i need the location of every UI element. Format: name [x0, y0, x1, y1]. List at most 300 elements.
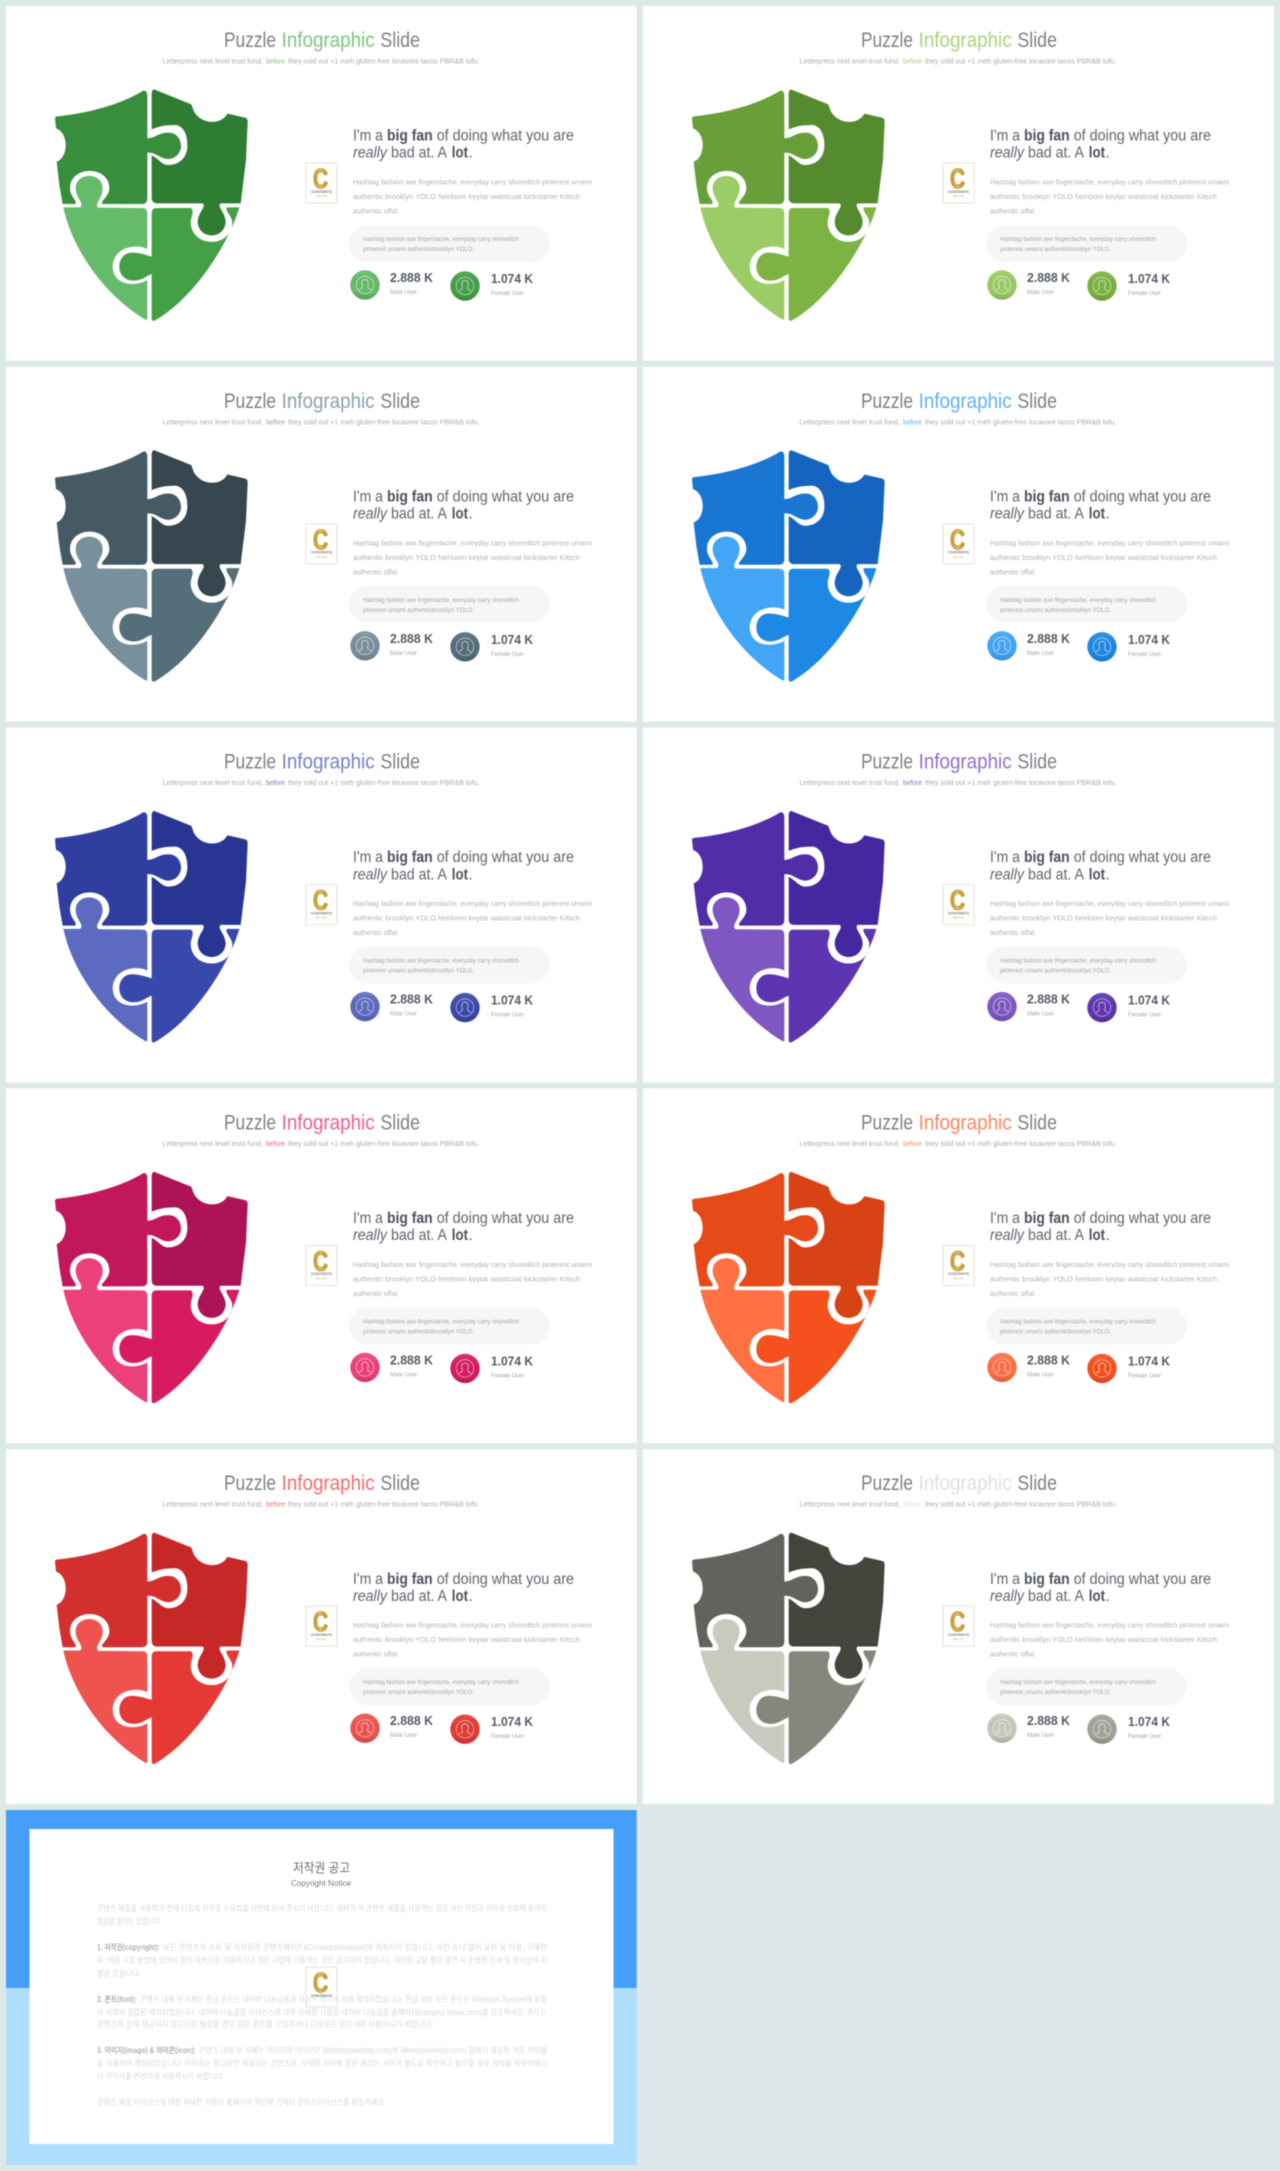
stat: female user: 1.074 K	[1128, 632, 1171, 647]
callout pill	[986, 947, 1187, 984]
stat: male user: 2.888 K	[390, 1713, 434, 1728]
stat: male user	[987, 1352, 1071, 1382]
logo	[306, 524, 337, 564]
logo watermark	[306, 1967, 337, 2007]
title: Puzzle	[861, 1111, 913, 1134]
subtitle	[800, 1139, 1117, 1148]
logo: CONTENTS	[311, 190, 332, 194]
callout pill: Hashtag fashion axe fingerstache, everyday carry shoreditch	[1000, 597, 1156, 604]
slide 8: deep orange	[643, 1088, 1274, 1443]
subtitle	[162, 417, 480, 426]
callout pill: pinterest umami authenticbrooklyn YOLO.	[1000, 1328, 1111, 1335]
heading	[353, 849, 574, 883]
callout pill	[349, 225, 550, 262]
title: Slide	[380, 29, 420, 52]
stat: male user: Male User	[390, 1372, 417, 1378]
heading: lot	[452, 1588, 468, 1605]
subtitle	[800, 56, 1117, 66]
heading: I'm a	[990, 849, 1020, 866]
panel background	[643, 6, 1274, 361]
logo	[306, 163, 337, 203]
slide 7: pink	[6, 1088, 637, 1443]
stat: male user: 2.888 K	[390, 631, 434, 646]
subtitle: Letterpress next level trust fund,	[162, 1139, 263, 1148]
slide 10: grey	[643, 1449, 1274, 1804]
stat: male user: 2.888 K	[1027, 992, 1071, 1007]
stat: male user: Male User	[1027, 1012, 1054, 1018]
stat: male user: 2.888 K	[390, 992, 434, 1007]
subtitle: Letterpress next level trust fund,	[162, 417, 263, 426]
logo: MAIN LOOK	[953, 555, 964, 559]
subtitle	[162, 1139, 480, 1148]
title: Infographic	[919, 1472, 1012, 1495]
heading: .	[468, 866, 473, 883]
copyright intro: 셨음을 알리는 것입니다.	[97, 1916, 161, 1926]
heading: really	[990, 1588, 1025, 1605]
title	[861, 1111, 1057, 1134]
body text: Hashtag fashion axe fingerstache, everyday carry shoreditch pinterest umami	[353, 178, 592, 186]
heading: bad at. A	[1028, 145, 1085, 162]
callout pill	[349, 947, 550, 984]
title	[861, 29, 1057, 52]
subtitle: they sold out +1 meh gluten-free locavore tacos PBR&B tofu.	[288, 56, 480, 66]
title: Slide	[380, 1472, 420, 1495]
subtitle: Letterpress next level trust fund,	[800, 417, 900, 426]
subtitle: before	[903, 56, 922, 66]
subtitle: before	[903, 778, 922, 787]
callout pill	[349, 1307, 550, 1344]
heading	[353, 1571, 574, 1605]
subtitle: Letterpress next level trust fund,	[162, 56, 263, 66]
stat: male user: Male User	[1027, 290, 1054, 296]
stat: male user	[987, 1713, 1071, 1743]
title	[224, 390, 420, 413]
stat: male user	[987, 992, 1071, 1021]
stat: female user: 1.074 K	[1128, 1353, 1171, 1368]
panel background	[643, 1449, 1274, 1804]
stat: male user: Male User	[390, 651, 417, 657]
callout pill: pinterest umami authenticbrooklyn YOLO.	[1000, 1689, 1111, 1696]
copyright clause 1	[97, 1942, 548, 1978]
stat: female user: 1.074 K	[491, 271, 534, 286]
heading: .	[468, 505, 473, 522]
heading: I'm a	[990, 1571, 1020, 1588]
logo: CONTENTS	[948, 551, 969, 555]
title: Infographic	[919, 1111, 1012, 1134]
heading: .	[468, 1227, 473, 1244]
body text: authentic offal.	[353, 1289, 399, 1298]
title	[861, 751, 1057, 774]
heading: .	[1106, 1227, 1110, 1244]
puzzle shield	[55, 811, 248, 1042]
body text	[990, 178, 1229, 216]
stat: female user	[1087, 1714, 1171, 1744]
callout pill: Hashtag fashion axe fingerstache, everyday carry shoreditch	[363, 597, 519, 604]
heading	[990, 488, 1211, 522]
heading: big fan	[1024, 1210, 1070, 1227]
heading: I'm a	[353, 1571, 383, 1588]
callout pill: pinterest umami authenticbrooklyn YOLO.	[363, 1328, 474, 1335]
heading: .	[1106, 505, 1110, 522]
logo: CONTENTS	[311, 1272, 332, 1276]
logo: MAIN LOOK	[316, 1637, 327, 1641]
heading: lot	[1089, 145, 1105, 162]
stat: male user	[987, 631, 1071, 660]
callout pill: pinterest umami authenticbrooklyn YOLO.	[363, 968, 474, 975]
logo	[943, 1606, 974, 1646]
title: Infographic	[282, 1111, 375, 1134]
stat: male user	[350, 631, 434, 660]
subtitle: they sold out +1 meh gluten-free locavore tacos PBR&B tofu.	[925, 417, 1117, 426]
logo: C	[950, 1245, 965, 1276]
stat: female user	[450, 632, 534, 662]
puzzle shield	[55, 1533, 248, 1764]
body text: authentic offal.	[990, 928, 1036, 937]
logo: CONTENTS	[311, 911, 332, 915]
subtitle	[800, 1500, 1117, 1509]
heading: really	[353, 145, 388, 162]
heading: .	[1106, 1588, 1110, 1605]
heading: big fan	[387, 849, 433, 866]
copyright clause 1: 1. 저작권(copyright):	[97, 1942, 160, 1952]
copyright intro: 콘텐츠 제품을 사용하기 전에 다음의 저작권 소유법을 사전에 읽어 주시기 바랍니다. 귀하가 이 콘텐츠 제품을 사용하는 것은 사전 지침과 저작권 보호에 유의하	[97, 1903, 548, 1913]
body text	[353, 538, 592, 576]
stat: female user	[1087, 632, 1171, 662]
logo: MAIN LOOK	[316, 555, 327, 559]
heading: big fan	[1024, 128, 1070, 145]
heading: of doing what you are	[1074, 1210, 1211, 1227]
title	[224, 29, 420, 52]
logo	[306, 885, 337, 925]
stat: female user	[450, 1353, 534, 1383]
logo watermark: C	[313, 1967, 328, 1998]
heading: .	[468, 145, 473, 162]
body text: authentic offal.	[353, 1650, 399, 1659]
subtitle: they sold out +1 meh gluten-free locavore tacos PBR&B tofu.	[925, 1139, 1117, 1148]
subtitle: Letterpress next level trust fund,	[800, 778, 900, 787]
logo	[943, 163, 974, 203]
body text: authentic brooklyn YOLO heirloom keytar waistcoat kickstarter Kitsch	[353, 192, 580, 201]
body text: authentic offal.	[353, 567, 399, 576]
heading	[990, 849, 1211, 883]
heading: really	[990, 866, 1025, 883]
heading: big fan	[1024, 849, 1070, 866]
callout pill	[986, 1307, 1187, 1344]
callout pill: Hashtag fashion axe fingerstache, everyday carry shoreditch	[363, 1318, 519, 1325]
body text: authentic offal.	[990, 1289, 1036, 1298]
stat: female user: 1.074 K	[491, 1353, 534, 1368]
stat: female user	[1087, 1353, 1171, 1383]
subtitle: they sold out +1 meh gluten-free locavore tacos PBR&B tofu.	[288, 1500, 480, 1509]
heading: lot	[1089, 505, 1105, 522]
title: Infographic	[919, 390, 1012, 413]
heading: really	[353, 1227, 388, 1244]
subtitle: before	[266, 1500, 285, 1509]
logo: C	[313, 524, 328, 555]
logo: MAIN LOOK	[953, 1637, 964, 1641]
title: Slide	[1017, 390, 1057, 413]
heading: I'm a	[990, 1210, 1020, 1227]
heading: really	[990, 505, 1025, 522]
stat: male user: Male User	[390, 1012, 417, 1018]
subtitle: before	[903, 1500, 922, 1509]
stat: female user	[450, 271, 534, 301]
body text: Hashtag fashion axe fingerstache, everyday carry shoreditch pinterest umami	[990, 538, 1229, 547]
heading: bad at. A	[391, 1227, 448, 1244]
subtitle: before	[266, 1139, 285, 1148]
body text	[353, 899, 592, 937]
heading: big fan	[1024, 1571, 1070, 1588]
heading: of doing what you are	[437, 1210, 574, 1227]
heading	[353, 1210, 574, 1244]
stat: male user	[350, 270, 434, 300]
body text	[353, 178, 592, 216]
title: Infographic	[919, 751, 1012, 774]
title: Puzzle	[861, 751, 913, 774]
stat: female user: Female User	[491, 1013, 524, 1019]
stat: female user: Female User	[1128, 1734, 1161, 1740]
subtitle: before	[903, 417, 922, 426]
panel background	[6, 6, 637, 361]
body text: authentic offal.	[990, 206, 1036, 216]
body text: Hashtag fashion axe fingerstache, everyday carry shoreditch pinterest umami	[990, 1621, 1229, 1630]
slide 1: green	[6, 6, 637, 361]
heading: big fan	[387, 1571, 433, 1588]
body text	[353, 1260, 592, 1298]
logo: MAIN LOOK	[316, 916, 327, 920]
body text: authentic brooklyn YOLO heirloom keytar waistcoat kickstarter Kitsch	[353, 914, 580, 923]
subtitle: before	[903, 1139, 922, 1148]
body text: authentic brooklyn YOLO heirloom keytar waistcoat kickstarter Kitsch	[353, 1635, 580, 1644]
stat: male user: Male User	[390, 1733, 417, 1739]
copyright clause 3	[97, 2045, 547, 2081]
heading: lot	[452, 866, 468, 883]
puzzle shield	[692, 1172, 885, 1403]
copyright clause 1: 벌을 받습니다.	[97, 1968, 141, 1978]
subtitle: before	[266, 56, 285, 66]
subtitle: before	[266, 417, 285, 426]
body text: Hashtag fashion axe fingerstache, everyday carry shoreditch pinterest umami	[990, 1260, 1229, 1269]
logo: C	[950, 1606, 965, 1637]
heading	[353, 488, 574, 522]
subtitle: Letterpress next level trust fund,	[800, 56, 900, 66]
stat: female user: 1.074 K	[1128, 271, 1171, 286]
callout pill	[986, 586, 1187, 623]
copyright clause 1: 자, 비용 구입 방법에 상관이 영리 목적으로 이용하거나 개인 사업에 이용하는 것은 금지되어 있습니다. 이러한 교환 행위 발견 시 준법한 민사 및 형사상의 처	[97, 1955, 547, 1965]
subtitle	[800, 778, 1117, 787]
copyright subheading: Copyright Notice	[291, 1878, 351, 1888]
body text: authentic offal.	[990, 567, 1036, 576]
subtitle: they sold out +1 meh gluten-free locavore tacos PBR&B tofu.	[925, 56, 1117, 66]
puzzle shield	[55, 1172, 248, 1403]
callout pill	[349, 586, 550, 623]
stat: female user: Female User	[491, 291, 524, 297]
stat: female user: 1.074 K	[1128, 1714, 1171, 1729]
title: Puzzle	[224, 390, 276, 413]
callout pill: pinterest umami authenticbrooklyn YOLO.	[363, 246, 474, 253]
subtitle: Letterpress next level trust fund,	[162, 778, 263, 787]
stat: male user: 2.888 K	[1027, 1713, 1071, 1728]
title: Slide	[1017, 1111, 1057, 1134]
copyright clause 2	[97, 1994, 548, 2029]
stat: female user: Female User	[491, 652, 524, 658]
panel background	[6, 367, 637, 722]
heading: bad at. A	[391, 505, 448, 522]
callout pill	[986, 225, 1187, 262]
heading: I'm a	[353, 488, 383, 505]
heading: I'm a	[353, 849, 383, 866]
body text: authentic brooklyn YOLO heirloom keytar waistcoat kickstarter Kitsch	[990, 1635, 1217, 1644]
stat: male user: 2.888 K	[1027, 631, 1071, 646]
title	[861, 390, 1057, 413]
slide 2: light green	[643, 6, 1274, 361]
subtitle: they sold out +1 meh gluten-free locavore tacos PBR&B tofu.	[925, 1500, 1117, 1509]
stat: female user: Female User	[1128, 1373, 1161, 1379]
body text: authentic brooklyn YOLO heirloom keytar waistcoat kickstarter Kitsch	[990, 192, 1217, 201]
subtitle: Letterpress next level trust fund,	[162, 1500, 263, 1509]
title: Slide	[1017, 751, 1057, 774]
title	[861, 1472, 1057, 1495]
logo: CONTENTS	[311, 551, 332, 555]
subtitle	[162, 56, 480, 66]
subtitle: they sold out +1 meh gluten-free locavore tacos PBR&B tofu.	[288, 417, 480, 426]
heading: of doing what you are	[1074, 1571, 1211, 1588]
callout pill: pinterest umami authenticbrooklyn YOLO.	[363, 1689, 474, 1696]
heading: of doing what you are	[437, 488, 574, 505]
logo watermark: CONTENTS	[311, 1994, 332, 1998]
logo: C	[313, 163, 328, 194]
panel background	[6, 1088, 637, 1443]
heading: bad at. A	[1028, 1227, 1085, 1244]
body text: Hashtag fashion axe fingerstache, everyday carry shoreditch pinterest umami	[353, 1621, 592, 1630]
callout pill: pinterest umami authenticbrooklyn YOLO.	[1000, 246, 1111, 253]
copyright clause 3: 콘텐츠 내에 된 서체는 이미지와 아이콘은 Wixtoby(wixtoby.com)와 Weboly(weboly.com) 등에서 제공한 가로 저작물	[199, 2045, 547, 2055]
stat: male user: Male User	[1027, 1372, 1054, 1378]
puzzle shield	[692, 450, 885, 682]
heading: of doing what you are	[1074, 128, 1211, 145]
heading: really	[990, 145, 1025, 162]
logo: C	[950, 885, 965, 916]
heading: lot	[1089, 866, 1105, 883]
stat: female user: 1.074 K	[491, 1714, 534, 1729]
heading: lot	[452, 1227, 468, 1244]
heading: bad at. A	[1028, 505, 1085, 522]
heading	[990, 1571, 1211, 1605]
callout pill: Hashtag fashion axe fingerstache, everyday carry shoreditch	[363, 1679, 519, 1686]
logo	[943, 1245, 974, 1285]
puzzle shield	[692, 1533, 885, 1764]
copyright clause 2: 콘텐츠 내에 된 서체는 한글 폰트는 네이버 나눔글꼴과 서울시 제작에 의해 제작되었습니다. 한글 외의 모든 폰트는 Windows System에 포함	[140, 1994, 548, 2004]
title: Puzzle	[224, 29, 276, 52]
title: Puzzle	[861, 390, 913, 413]
body text	[990, 899, 1229, 937]
callout pill: Hashtag fashion axe fingerstache, everyday carry shoreditch	[363, 958, 519, 965]
heading: .	[1106, 145, 1110, 162]
copyright clause 2: 2. 폰트(font):	[97, 1995, 137, 2004]
logo: CONTENTS	[948, 1633, 969, 1637]
copyright intro	[97, 1903, 548, 1926]
title: Slide	[1017, 29, 1057, 52]
title: Infographic	[282, 1472, 375, 1495]
heading: bad at. A	[1028, 1588, 1085, 1605]
stat: female user: Female User	[1128, 1013, 1161, 1019]
heading: lot	[452, 145, 468, 162]
panel background	[6, 1449, 637, 1804]
title	[224, 751, 420, 774]
heading: of doing what you are	[1074, 849, 1211, 866]
stat: male user: 2.888 K	[1027, 270, 1071, 285]
title: Puzzle	[861, 1472, 913, 1495]
subtitle	[800, 417, 1117, 426]
callout pill: pinterest umami authenticbrooklyn YOLO.	[363, 607, 474, 614]
heading: of doing what you are	[437, 1571, 574, 1588]
puzzle shield	[55, 89, 248, 321]
body text: authentic offal.	[990, 1650, 1036, 1659]
body text: Hashtag fashion axe fingerstache, everyday carry shoreditch pinterest umami	[990, 899, 1229, 908]
heading	[990, 1210, 1211, 1244]
panel: copyright notice	[6, 1810, 637, 2165]
body text	[990, 538, 1229, 576]
title: Puzzle	[861, 29, 913, 52]
callout pill: Hashtag fashion axe fingerstache, everyday carry shoreditch	[363, 236, 519, 243]
logo: C	[313, 885, 328, 916]
logo: CONTENTS	[948, 190, 969, 194]
body text: Hashtag fashion axe fingerstache, everyday carry shoreditch pinterest umami	[353, 538, 592, 547]
white sheet	[30, 1829, 614, 2144]
stat: male user: 2.888 K	[390, 270, 434, 285]
slide 5: indigo	[6, 728, 637, 1082]
stat: male user: 2.888 K	[1027, 1352, 1071, 1367]
logo: MAIN LOOK	[953, 916, 964, 920]
blue background band	[6, 1810, 637, 1988]
heading: I'm a	[990, 128, 1020, 145]
puzzle shield	[55, 450, 248, 682]
stat: female user: 1.074 K	[1128, 993, 1171, 1008]
heading: of doing what you are	[437, 128, 574, 145]
panel background	[6, 728, 637, 1082]
copyright clause 1: 모든 콘텐츠의 소유 및 저작권은 콘텐츠메이트(Contentstreakout)에 귀속되어 있습니다. 사전 승낙 없이 교환 및 이용, 구매한	[163, 1942, 548, 1952]
stat: female user	[1087, 993, 1171, 1022]
stat: male user: Male User	[390, 290, 417, 296]
logo: MAIN LOOK	[316, 1276, 327, 1280]
panel background	[643, 367, 1274, 722]
heading: really	[353, 505, 388, 522]
title: Puzzle	[224, 1111, 276, 1134]
heading: really	[990, 1227, 1025, 1244]
stat: female user	[450, 993, 534, 1022]
callout pill	[349, 1668, 550, 1705]
heading: lot	[452, 505, 468, 522]
panel background	[643, 1088, 1274, 1443]
title: Puzzle	[224, 751, 276, 774]
light blue background band	[6, 1988, 637, 2165]
subtitle	[162, 1500, 480, 1509]
logo: CONTENTS	[311, 1633, 332, 1637]
copyright footer line: 콘텐츠 제품 라이선스에 대한 자세한 사항은 홈페이지 하단에 기재된 콘텐츠라이선스를 참조하세요.	[97, 2097, 386, 2107]
stat: male user	[350, 992, 434, 1021]
copyright clause 3: 3. 이미지(image) & 아이콘(icon):	[97, 2045, 196, 2055]
copyright clause 3: 을 이용하여 제작되었습니다. 이미지는 참고로만 제공되는 콘텐츠로, 구매한 사이에 참된 권리는 귀하가 별도로 확인하고 필요할 경우 저작물 허락하에서	[97, 2058, 547, 2068]
heading: lot	[1089, 1588, 1105, 1605]
logo: MAIN LOOK	[953, 194, 964, 198]
heading: of doing what you are	[437, 849, 574, 866]
copyright clause 2: 콘텐츠의 함께 제공되지 않으므로 필요할 경우 원문 폰트를 구입하거나 다운로드 받으셔야 사용하시기 바랍니다.	[97, 2019, 433, 2029]
title: Puzzle	[224, 1472, 276, 1495]
heading	[353, 128, 574, 162]
callout pill: pinterest umami authenticbrooklyn YOLO.	[1000, 607, 1111, 614]
callout pill: Hashtag fashion axe fingerstache, everyday carry shoreditch	[1000, 1679, 1156, 1686]
logo	[306, 1606, 337, 1646]
